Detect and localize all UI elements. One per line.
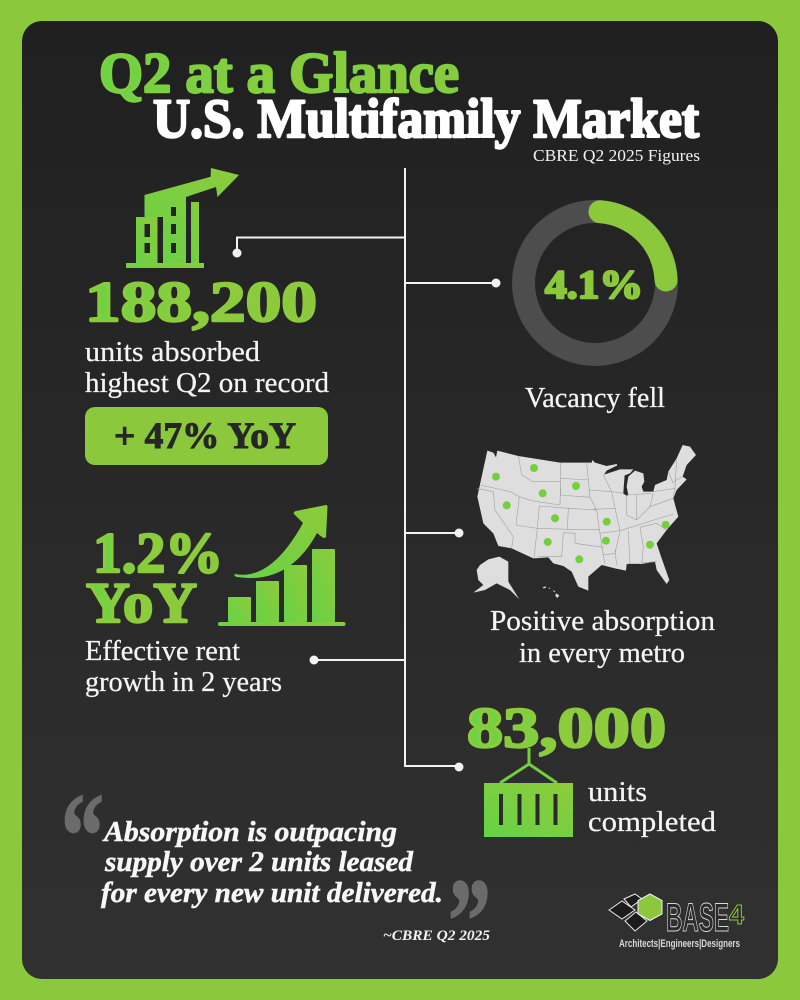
quote: ”: [448, 854, 491, 989]
callout: year over year: + 47% YoY: [114, 416, 296, 457]
icon: building with rising arrow: [126, 168, 239, 268]
quote: Absorption is outpacing: [102, 816, 397, 848]
stat: units absorbed: units absorbed: [85, 336, 261, 368]
title: Q2 at a Glance: [99, 42, 459, 105]
stat: rent growth: [85, 522, 282, 698]
logo: BASE4: 4: [729, 899, 744, 930]
quote: supply over 2 units leased: [104, 846, 413, 878]
quote: [61, 769, 491, 989]
stat: units completed: 83,000: [467, 697, 666, 760]
icon: shipping container: [484, 748, 573, 837]
stat: rent growth: growth in 2 years: [85, 666, 282, 698]
stat: units completed: completed: [588, 806, 717, 838]
stat: units completed: [467, 697, 717, 838]
label: positive absorption: Positive absorption: [490, 605, 715, 637]
stat: rent growth: YoY: [86, 572, 197, 635]
map: United States: [473, 445, 696, 599]
title: [99, 42, 700, 165]
label: positive absorption: [490, 605, 715, 669]
title: U.S. Multifamily Market: [153, 88, 700, 149]
label: vacancy fell: Vacancy fell: [525, 382, 665, 414]
logo: BASE4: BASE: [666, 896, 729, 940]
stat: rent growth: 1.2%: [93, 522, 223, 585]
icon: bar chart with arrow: [218, 505, 346, 626]
connector lines: [232, 168, 500, 772]
label: positive absorption: in every metro: [519, 637, 685, 669]
logo: BASE4: [609, 894, 744, 950]
donut chart: vacancy: 4.1%: [545, 262, 643, 307]
quote: ~CBRE Q2 2025: [383, 928, 491, 944]
donut chart: vacancy: [524, 212, 666, 354]
callout: year over year: [85, 407, 328, 465]
stat: rent growth: Effective rent: [85, 635, 240, 667]
stat: units completed: units: [588, 776, 647, 808]
stat: units absorbed: 188,200: [85, 271, 317, 334]
quote: for every new unit delivered.: [101, 877, 443, 909]
stat: units absorbed: highest Q2 on record: [85, 367, 329, 399]
logo: BASE4: Architects|Engineers|Designers: [619, 938, 740, 950]
map markers: [492, 464, 670, 563]
quote: “: [61, 769, 104, 904]
stat: units absorbed: [85, 271, 329, 399]
title: CBRE Q2 2025 Figures: [533, 146, 700, 165]
